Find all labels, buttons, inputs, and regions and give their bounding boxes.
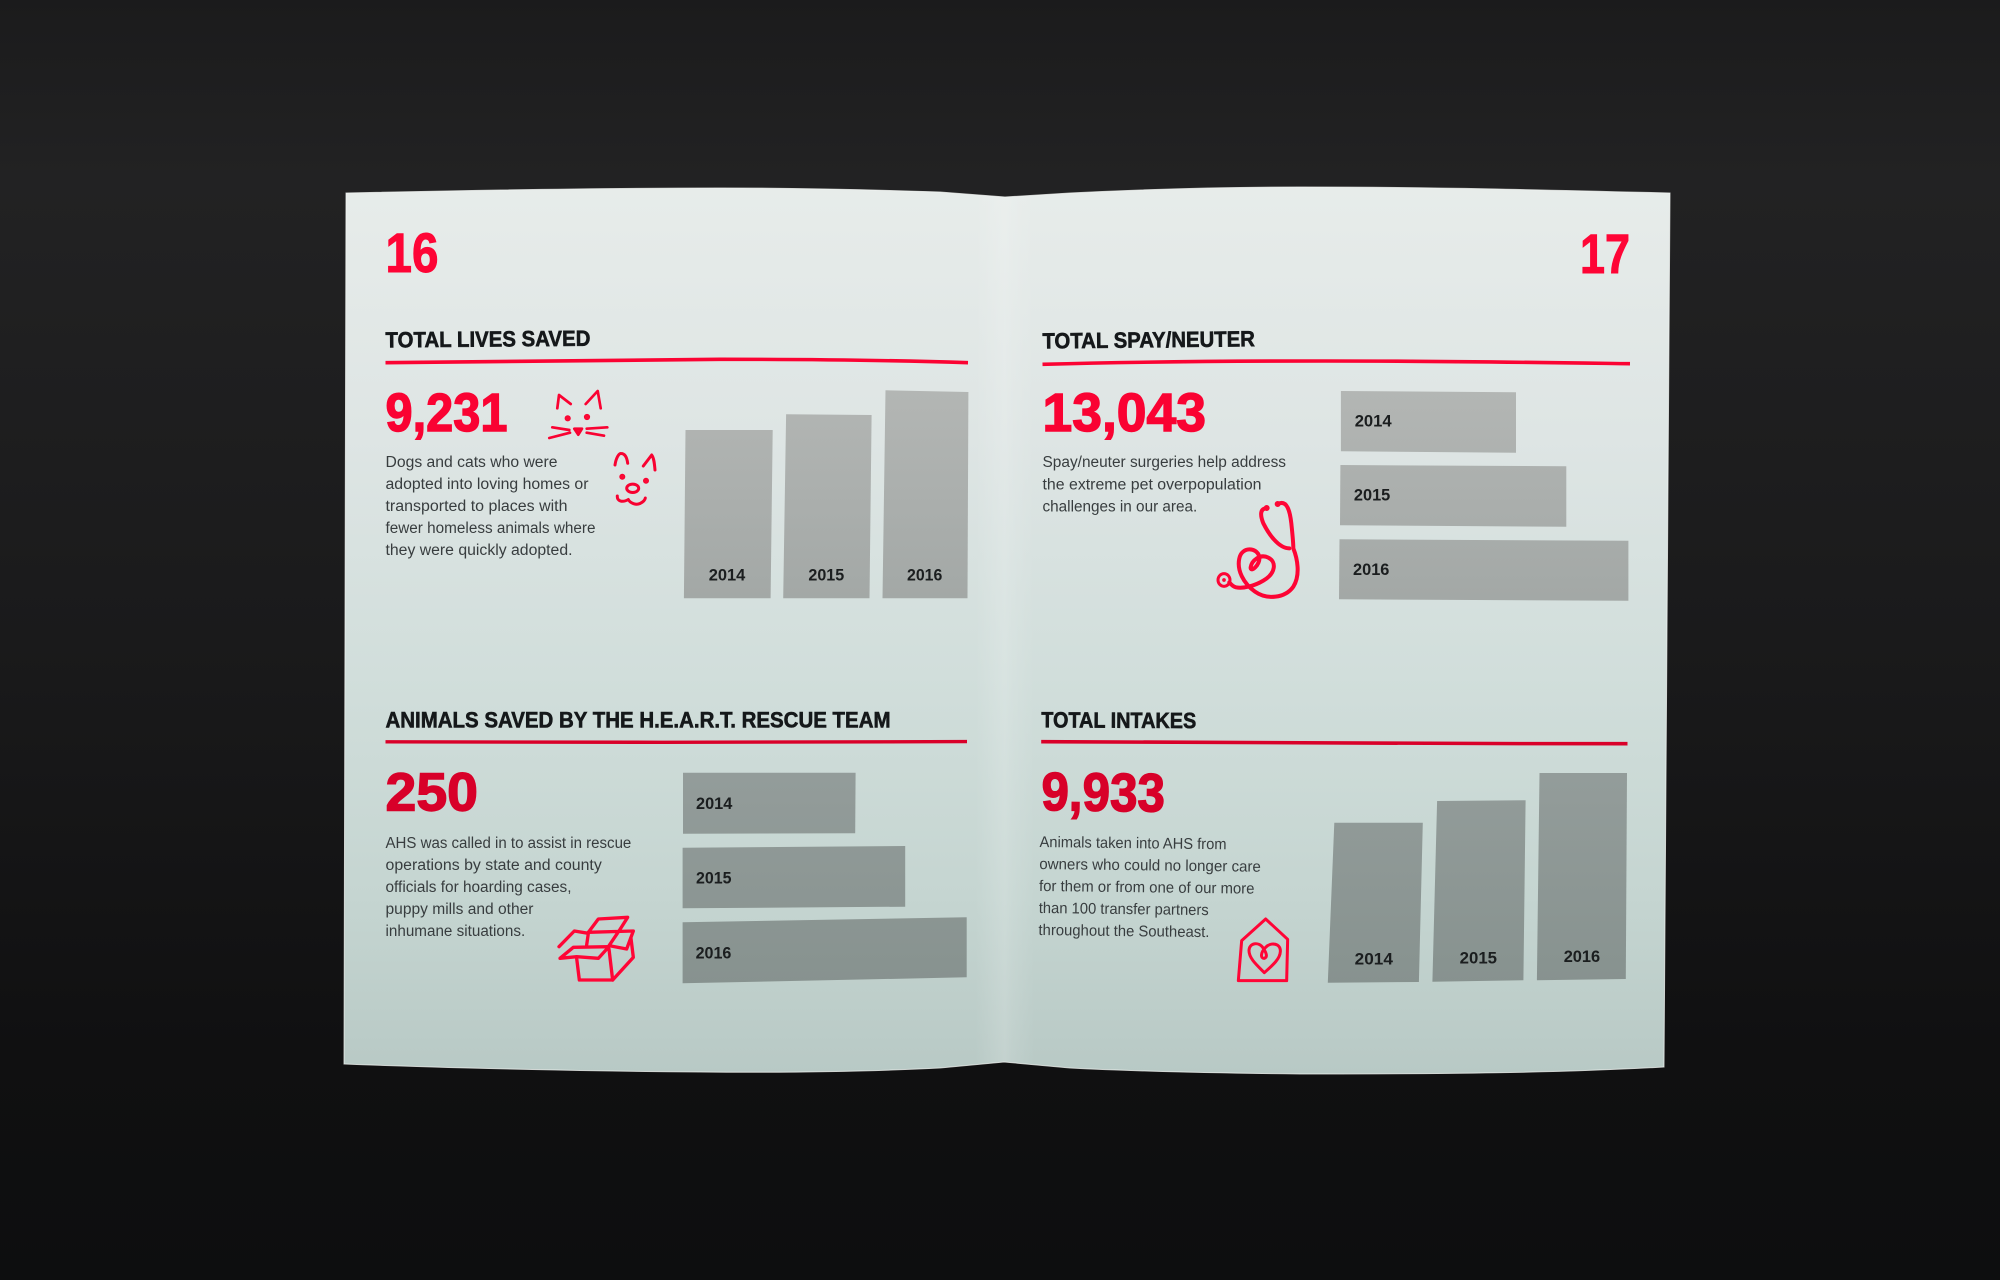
bar 2016 [1339, 539, 1628, 601]
description: they were quickly adopted. [386, 542, 572, 559]
bar 2016: 2016 [1353, 561, 1389, 579]
heading: TOTAL LIVES SAVED [385, 326, 591, 352]
description: than 100 transfer partners [1039, 900, 1209, 919]
description [386, 454, 596, 559]
bar 2014: 2014 [696, 795, 733, 813]
description: inhumane situations. [386, 923, 525, 940]
description: Spay/neuter surgeries help address [1042, 454, 1286, 471]
bar 2015 [1432, 800, 1526, 982]
red rule [1042, 361, 1630, 364]
bar chart [1328, 773, 1627, 983]
red rule [386, 740, 967, 744]
icon: stethoscope with heart tube [1218, 502, 1298, 597]
icon: house with heart [1238, 919, 1288, 981]
description [1038, 834, 1261, 942]
description: adopted into loving homes or [386, 476, 588, 493]
description: Dogs and cats who were [386, 454, 558, 471]
description: challenges in our area. [1042, 499, 1197, 516]
open booklet [344, 187, 1670, 1074]
bar 2014 [1328, 823, 1423, 983]
description: transported to places with [386, 498, 568, 515]
description: Animals taken into AHS from [1039, 834, 1227, 853]
icon: cat face [549, 391, 607, 438]
panel: total intakes [1038, 707, 1628, 983]
description: officials for hoarding cases, [386, 879, 572, 896]
bar 2016: 2016 [907, 567, 942, 585]
bar 2014: 2014 [1355, 413, 1393, 431]
bar 2016: 2016 [696, 944, 731, 962]
big number: 250 [386, 763, 478, 823]
panel: total lives saved [385, 326, 968, 598]
bar 2015: 2015 [1354, 487, 1390, 505]
bar 2015 [783, 414, 872, 598]
heading: TOTAL SPAY/NEUTER [1042, 326, 1255, 353]
panel: total spay/neuter [1042, 326, 1630, 601]
description [386, 835, 631, 940]
heading: ANIMALS SAVED BY THE H.E.A.R.T. RESCUE TEAM [386, 707, 890, 732]
bar 2016 [1537, 773, 1627, 980]
description: for them or from one of our more [1039, 878, 1255, 898]
bar 2014 [684, 430, 773, 598]
heading: TOTAL INTAKES [1041, 707, 1196, 733]
bar 2015 [1340, 465, 1566, 527]
bar 2015: 2015 [808, 567, 844, 585]
description [1042, 454, 1286, 516]
page number 17: 17 [1580, 222, 1630, 285]
horizontal bar chart [683, 773, 967, 983]
bar 2015: 2015 [1460, 949, 1497, 967]
red rule [386, 359, 968, 363]
bar chart [684, 390, 968, 598]
bar 2014: 2014 [1355, 950, 1394, 968]
description: puppy mills and other [386, 901, 534, 918]
description: throughout the Southeast. [1038, 922, 1210, 941]
red rule [1041, 742, 1628, 744]
bar 2016: 2016 [1564, 948, 1600, 966]
description: owners who could no longer care [1039, 856, 1261, 876]
bar 2015: 2015 [696, 869, 732, 887]
bar 2014 [683, 773, 856, 834]
bar 2015 [683, 846, 905, 908]
bar 2014: 2014 [709, 567, 746, 585]
bar 2016 [882, 390, 968, 598]
description: AHS was called in to assist in rescue [386, 835, 631, 852]
horizontal bar chart [1339, 391, 1628, 601]
big number: 9,933 [1041, 762, 1165, 824]
description: fewer homeless animals where [386, 520, 596, 537]
big number: 13,043 [1042, 383, 1206, 443]
description: operations by state and county [386, 857, 602, 874]
icon: dog face [615, 453, 655, 504]
description: the extreme pet overpopulation [1042, 476, 1262, 493]
page number 16: 16 [386, 221, 438, 284]
icon: open box [559, 917, 633, 980]
panel: animals saved by the heart rescue team [386, 707, 967, 983]
bar 2016 [683, 917, 967, 983]
bar 2014 [1341, 391, 1516, 453]
big number: 9,231 [386, 383, 508, 443]
